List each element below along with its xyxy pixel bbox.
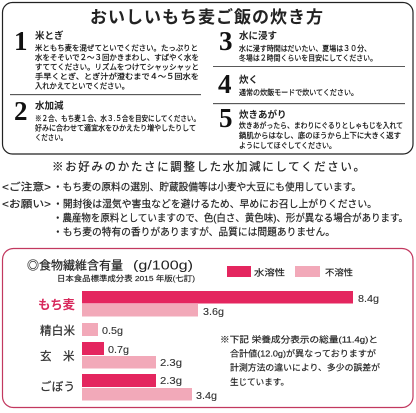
step 4 (218, 69, 358, 99)
step 4: 4 (218, 69, 232, 99)
step 1 (14, 26, 199, 90)
step 5: ようにしてほぐしてください。 (239, 141, 336, 150)
step 3 (219, 26, 377, 62)
row: polished rice: 精白米 (40, 324, 76, 338)
row: brown rice: 米 (63, 350, 75, 363)
legend (227, 266, 353, 278)
step 5: 5 (219, 103, 232, 133)
step 2: 水加減 (35, 100, 64, 112)
step 4: 炊く (239, 74, 258, 86)
step 2: ※２合、もち麦１合、水３.５合を目安にしてください。 (35, 113, 200, 123)
footnote: 合計値(12.0g)が異なっておりますが (230, 348, 377, 358)
cautions and requests: <ご注意> (2, 180, 51, 194)
panel: cooking instructions (2, 2, 413, 154)
step 3: 水に浸す時間はだいたい、夏場は３０分、 (239, 43, 371, 53)
row: polished rice (40, 323, 123, 338)
row: brown rice (40, 342, 182, 369)
cautions and requests: <お願い> (2, 198, 51, 210)
step 1: 手早くとぎ、とぎ汁が澄むまで４〜５回水を (35, 71, 199, 81)
row: burdock: 3.4g (196, 390, 217, 402)
step 4: 通常の炊飯モードで炊いてください。 (239, 87, 358, 97)
row: burdock (40, 374, 217, 402)
step 2: 好みに合わせて適宜水をひかえたり増やしたりして (35, 122, 196, 132)
chart source: 日本食品標準成分表 2015 年版(七訂) (57, 273, 196, 283)
step 2: 2 (14, 96, 28, 126)
footnote (220, 334, 381, 387)
step 2: ください。 (35, 133, 67, 142)
cautions and requests: ・もち麦の特有の香りがありますが、品質には問題ありません。 (53, 226, 335, 238)
step 1: 米ともち麦を混ぜてといでください。たっぷりと (35, 42, 198, 52)
step 1: 入れかえてといでください。 (35, 82, 129, 90)
cautions and requests: ・もち麦の原料の選別、貯蔵設備等は小麦や大豆にも使用しています。 (53, 180, 361, 194)
row: mochi barley: 8.4g (358, 293, 379, 305)
row: burdock: 2.3g (160, 375, 182, 387)
title: おいしいもち麦ご飯の炊き方 (90, 7, 323, 27)
row: brown rice: 玄 (40, 350, 52, 363)
step 3: 3 (219, 26, 232, 56)
cautions and requests: ・開封後は湿気や害虫などを避けるため、早めにお召し上がりください。 (53, 198, 377, 210)
row: mochi barley: もち麦 (38, 297, 75, 312)
legend: 水溶性 (254, 268, 285, 278)
chart title: ◎食物繊維含有量 (27, 258, 123, 272)
step 3: 水に浸す (239, 30, 277, 42)
step 5: 炊きあがり (239, 109, 287, 121)
step 1: 1 (14, 26, 28, 56)
step 5: 鍋肌からはなし、底のほうから上下に大きく返す (239, 130, 401, 140)
panel: dietary fiber chart (2, 248, 413, 408)
row: brown rice: 2.3g (160, 357, 182, 369)
footnote: 生じています。 (230, 377, 289, 387)
row: mochi barley: 3.6g (203, 306, 224, 318)
cautions and requests (2, 180, 408, 238)
step 2 (14, 96, 200, 142)
step 5 (219, 103, 403, 150)
chart title (27, 258, 193, 272)
row: polished rice: 0.5g (102, 325, 123, 337)
step 5: 炊きあがったら、まわりにぐるりとしゃもじを入れて (239, 120, 403, 130)
water adjustment note: ※お好みのかたさに調整した水加減にしてください。 (52, 160, 365, 174)
row: burdock: ごぼう (40, 380, 75, 394)
row: mochi barley (38, 291, 379, 318)
footnote: 計測方法の違いにより、多少の誤差が (230, 362, 381, 372)
chart title: (g/100g) (133, 258, 193, 272)
step 1: すててください。リズムをつけてシャッシャッと (35, 62, 199, 72)
step 1: 米とぎ (35, 30, 64, 42)
step 3: 冬場は２時間くらいを目安にしてください。 (239, 52, 377, 62)
row: brown rice: 0.7g (108, 344, 129, 356)
step 1: 水をそそいで２〜３回かきまわし、すばやく水を (35, 52, 199, 62)
legend: 不溶性 (325, 268, 353, 278)
footnote: ※下記 栄養成分表示の総量(11.4g)と (220, 334, 378, 344)
